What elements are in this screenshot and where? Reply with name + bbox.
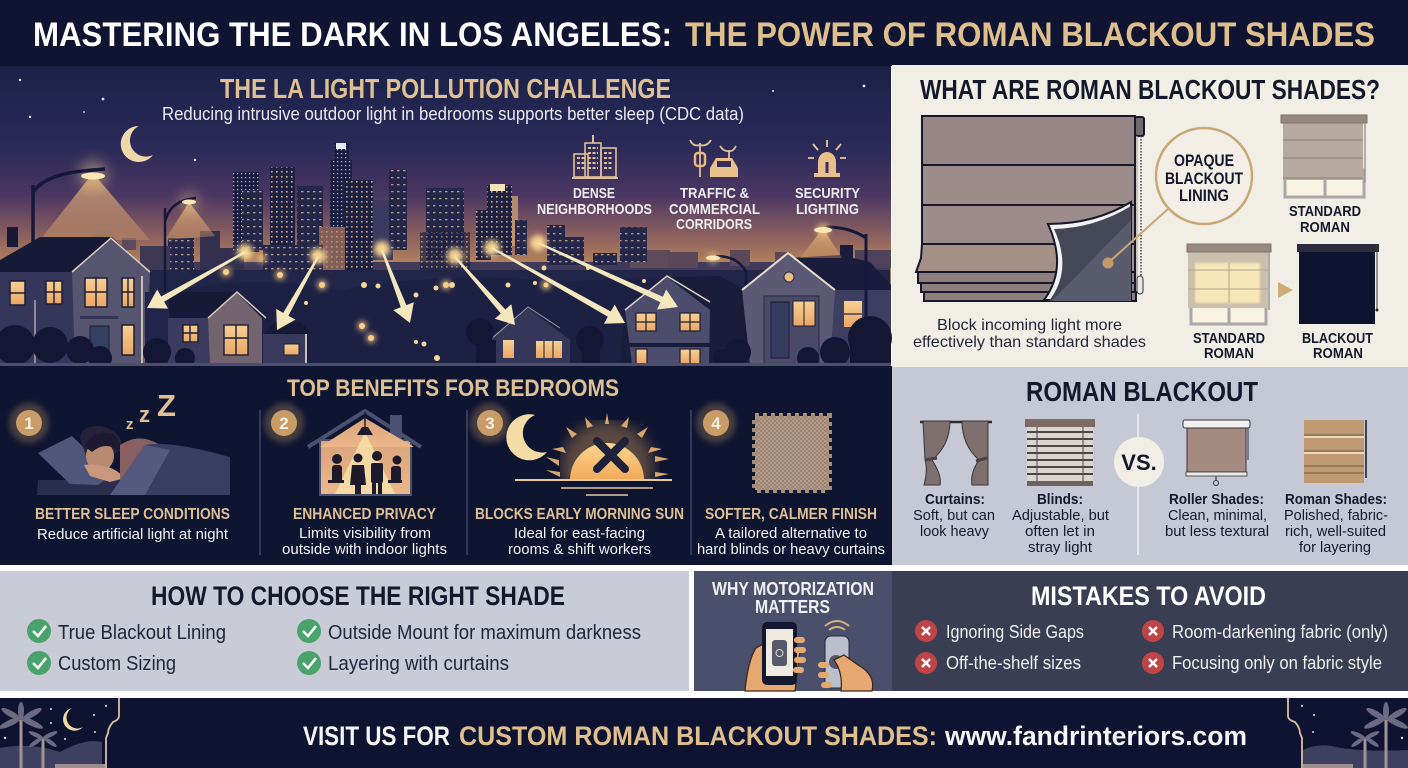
street lamp 3: [706, 252, 746, 364]
label: SOFTER, CALMER FINISH: [705, 506, 877, 523]
heading: MISTAKES TO AVOID: [1031, 581, 1266, 611]
icon: zzz: z: [126, 416, 134, 433]
comparison: roller shades: Clean, minimal,: [1168, 508, 1267, 524]
description: [697, 525, 885, 558]
panel: why motorization matters: [694, 571, 892, 691]
mistake: fabric style: Focusing only on fabric style: [1172, 653, 1382, 673]
icon: fabric swatch: [755, 416, 829, 490]
label: traffic and commercial corridors: TRAFFIC &: [680, 185, 749, 202]
check item: custom sizing: Custom Sizing: [58, 653, 176, 675]
title band: [0, 0, 1408, 66]
icon: sun with cross: [515, 413, 672, 496]
dividers: [260, 410, 691, 555]
icon: blinds: [1025, 419, 1095, 486]
description: Reduce artificial light at night: [37, 526, 229, 543]
heading: WHY MOTORIZATION: [712, 579, 874, 599]
panel: roman blackout comparison: [892, 367, 1408, 565]
comparison: roman shades: Roman Shades:: [1285, 492, 1387, 508]
icon: zzz: Z: [157, 388, 176, 423]
label: standard roman top: STANDARD: [1289, 204, 1361, 220]
stars: [19, 79, 865, 161]
label: dense neighborhoods: DENSE: [573, 185, 615, 202]
label: traffic and commercial corridors: CORRIDORS: [676, 216, 752, 233]
comparison: roman shades: for layering: [1299, 540, 1371, 556]
caption: [913, 317, 1146, 351]
check item: outside mount: Outside Mount for maximum darkness: [328, 622, 641, 644]
icon: moon: [506, 414, 547, 460]
comparison: blinds: [1012, 492, 1109, 556]
footer scene right: [1288, 698, 1408, 768]
illustration: standard roman lit: [1187, 244, 1271, 324]
footer scene left: [0, 698, 119, 768]
illustration: standard roman, top: [1281, 115, 1367, 197]
icon: buildings: [572, 135, 618, 178]
comparison: blinds: stray light: [1028, 540, 1092, 556]
labels: standard vs blackout: ROMAN: [1204, 346, 1254, 362]
label: security lighting: LIGHTING: [796, 201, 859, 218]
comparison: roller shades: Roller Shades:: [1169, 492, 1264, 508]
icon: roller shade: [1183, 420, 1250, 486]
comparison: curtains: Curtains:: [925, 492, 985, 508]
vs badge: [1114, 437, 1164, 487]
label: standard roman top: [1289, 204, 1361, 236]
comparison: curtains: Soft, but can: [913, 508, 995, 524]
downtown towers: [233, 143, 527, 285]
callout: opaque blackout lining: BLACKOUT: [1165, 170, 1243, 188]
icon: zzz: z: [139, 402, 150, 427]
icon: roman shade: [1304, 420, 1366, 483]
comparison: blinds: Adjustable, but: [1012, 508, 1109, 524]
description: [282, 525, 447, 558]
icon: traffic lights and car: [690, 140, 738, 177]
panel subtitle: Reducing intrusive outdoor light in bedrooms supports better sleep (CDC data): [162, 103, 744, 124]
chain cord: [1137, 136, 1143, 294]
mistake: ignoring side gaps: Ignoring Side Gaps: [946, 622, 1084, 642]
benefit 4: softer finish: 4: [711, 414, 721, 433]
benefit 4: softer finish: [696, 403, 885, 558]
footer call to action: visit us for: VISIT US FOR: [303, 721, 450, 751]
heading: [712, 579, 874, 617]
street lamp 1: [33, 161, 150, 364]
label: traffic and commercial corridors: [669, 185, 760, 233]
heading: HOW TO CHOOSE THE RIGHT SHADE: [151, 581, 565, 611]
panel: mistakes to avoid: [892, 571, 1408, 691]
city ground with street lights: [150, 253, 890, 366]
comparison: roman shades: [1284, 492, 1388, 556]
icon: curtains: [920, 421, 992, 485]
check item: custom sizing: [27, 651, 176, 675]
benefit 1: better sleep: 1: [24, 414, 34, 433]
comparison: curtains: look heavy: [920, 524, 990, 540]
labels: standard vs blackout: BLACKOUT: [1302, 331, 1373, 347]
icon: hand with remote: [821, 621, 873, 691]
description: rooms & shift workers: [508, 541, 651, 558]
panel: what are roman blackout shades: [892, 65, 1408, 367]
benefit 2: enhanced privacy: 2: [279, 414, 289, 433]
label: standard roman top: ROMAN: [1300, 220, 1350, 236]
check item: layering: Layering with curtains: [328, 653, 509, 675]
label: dense neighborhoods: NEIGHBORHOODS: [537, 201, 652, 218]
label: security lighting: SECURITY: [795, 185, 860, 202]
comparison: curtains: [913, 492, 995, 540]
panel: LA light pollution challenge: [0, 66, 892, 370]
benefit 2: enhanced privacy: [264, 403, 447, 558]
callout: opaque blackout lining: LINING: [1179, 187, 1229, 205]
callout: opaque blackout lining: [1102, 128, 1252, 268]
arrows: outdoor light into bedrooms: [142, 233, 683, 335]
comparison: roller shades: but less textural: [1165, 524, 1269, 540]
icon: sleeping person: [37, 426, 230, 495]
comparison: roller shades: [1165, 492, 1269, 540]
labels: standard vs blackout: ROMAN: [1313, 346, 1363, 362]
benefit 3: blocks morning sun: 3: [485, 414, 495, 433]
label: traffic and commercial corridors: COMMERCIAL: [669, 201, 760, 218]
comparison: roman shades: rich, well-suited: [1285, 524, 1386, 540]
house 4: [488, 307, 570, 364]
description: Ideal for east-facing: [514, 525, 645, 542]
house 2: [145, 292, 266, 364]
night sky background: [0, 66, 891, 366]
heading: TOP BENEFITS FOR BEDROOMS: [287, 375, 619, 402]
labels: standard vs blackout: STANDARD: [1193, 331, 1265, 347]
ground strip: [0, 363, 891, 366]
label: security lighting: [795, 185, 860, 218]
label: BLOCKS EARLY MORNING SUN: [475, 506, 684, 523]
icon: hand with phone: [745, 622, 803, 691]
house 5: [620, 276, 745, 364]
street lamp 2: [165, 193, 215, 364]
illustration: blackout roman: [1297, 244, 1379, 324]
street lamp 4: [814, 223, 866, 364]
label: ENHANCED PRIVACY: [293, 506, 436, 523]
bushes and trees: [0, 316, 892, 370]
icon: family inside house: [308, 411, 421, 495]
check item: true blackout lining: True Blackout Lining: [58, 622, 226, 644]
moon: [121, 126, 153, 162]
description: A tailored alternative to: [715, 525, 867, 542]
comparison: blinds: Blinds:: [1037, 492, 1083, 508]
illustration: main roman shade with lining: [916, 116, 1144, 301]
house 3: [263, 322, 313, 364]
footer call to action: custom roman blackout shades: CUSTOM ROMAN BLACKOUT SHADES:: [459, 721, 937, 751]
vs badge: VS.: [1121, 450, 1157, 475]
description: hard blinds or heavy curtains: [697, 541, 885, 558]
benefit 1: better sleep: [9, 388, 230, 543]
mistake: room-darkening fabric: Room-darkening fabric (only): [1172, 622, 1388, 642]
arrow: standard to blackout: [1278, 282, 1293, 298]
comparison: blinds: often let in: [1025, 524, 1095, 540]
icon: zzz: [126, 388, 176, 433]
description: [508, 525, 651, 558]
caption: effectively than standard shades: [913, 334, 1146, 351]
footer call to action: website: www.fandrinteriors.com: [944, 721, 1247, 751]
panel heading: THE LA LIGHT POLLUTION CHALLENGE: [220, 73, 671, 104]
callout: opaque blackout lining: OPAQUE: [1174, 152, 1234, 170]
label: BETTER SLEEP CONDITIONS: [35, 506, 230, 523]
house 6: [742, 228, 891, 364]
icon: security light: [808, 140, 846, 177]
description: outside with indoor lights: [282, 541, 447, 558]
benefit 3: blocks morning sun: [470, 403, 684, 558]
panel: top benefits for bedrooms: [0, 366, 892, 565]
distant skyline: [93, 225, 891, 292]
label: dense neighborhoods: [537, 185, 652, 218]
footer banner: [0, 698, 1408, 768]
comparison: roman shades: Polished, fabric-: [1284, 508, 1388, 524]
labels: standard vs blackout: [1193, 331, 1373, 362]
heading: ROMAN BLACKOUT: [1026, 376, 1258, 407]
mistake: off the shelf sizes: Off-the-shelf sizes: [946, 653, 1081, 673]
light glow sources: [237, 235, 546, 264]
description: Limits visibility from: [299, 525, 431, 542]
house 1: [0, 227, 150, 364]
divider line: [1137, 414, 1139, 555]
panel: how to choose the right shade: [0, 571, 689, 691]
caption: Block incoming light more: [937, 317, 1122, 334]
mistake: ignoring side gaps: [915, 620, 1084, 642]
heading: MATTERS: [755, 597, 830, 617]
title text white: MASTERING THE DARK IN LOS ANGELES:: [33, 16, 672, 54]
